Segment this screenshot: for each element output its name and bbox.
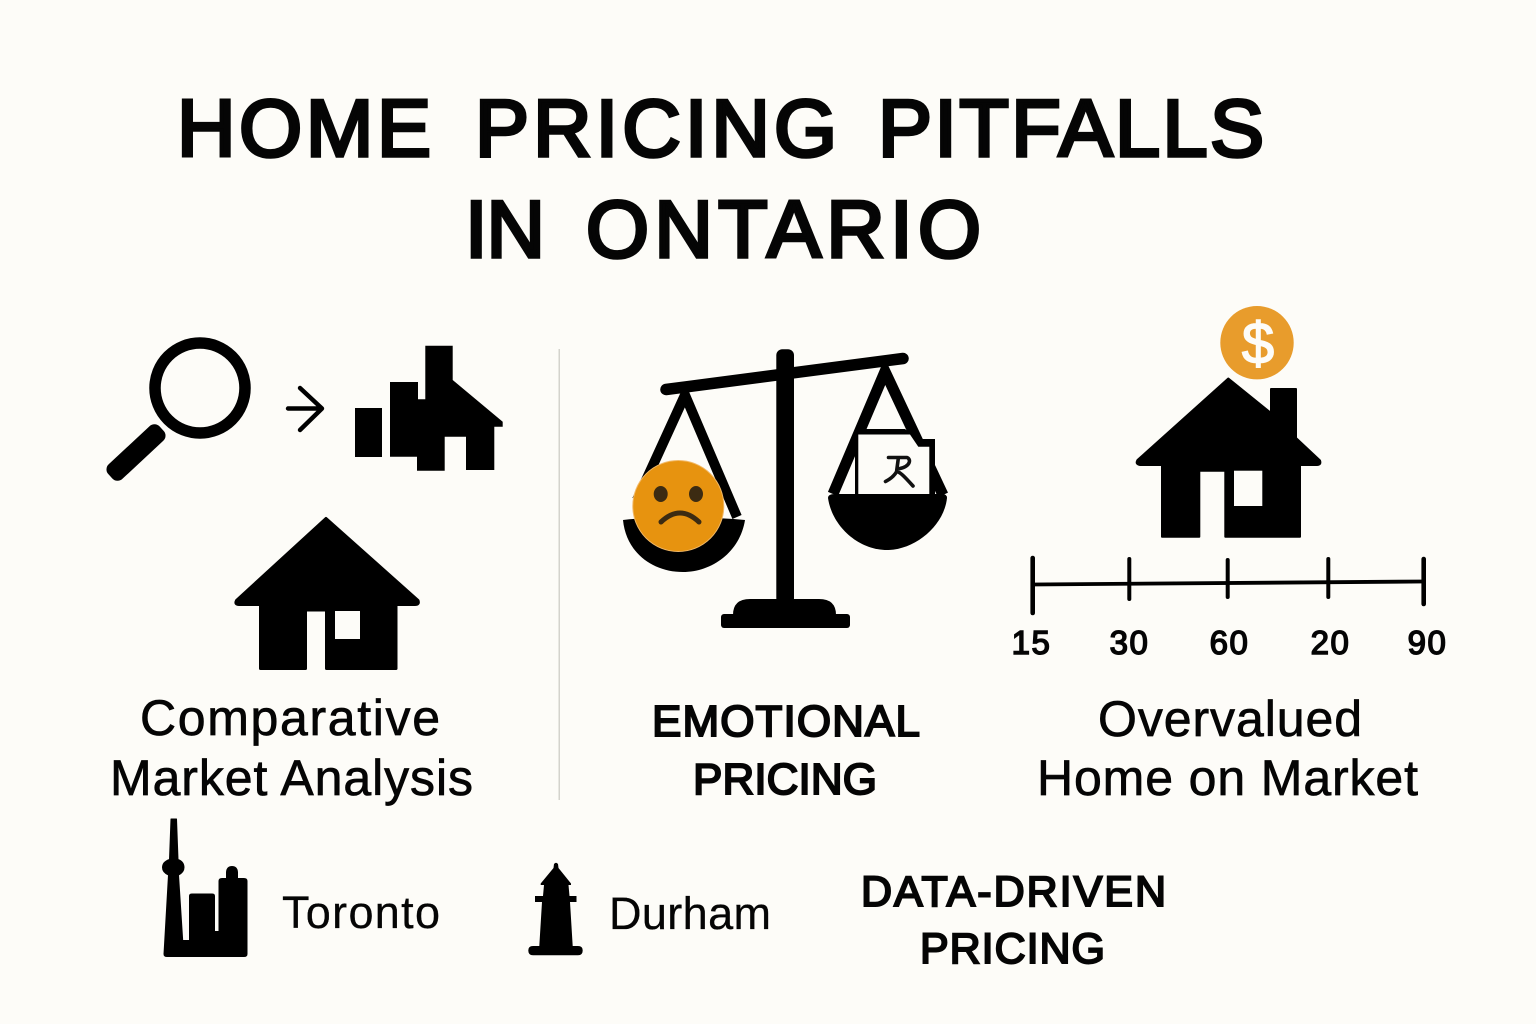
- label: data-driven pricing: PRICING: [920, 925, 1105, 973]
- title: PRICING: [475, 84, 837, 174]
- timeline values: 60: [1210, 624, 1249, 661]
- timeline values: 30: [1110, 624, 1149, 661]
- panel: comparative market analysis: [104, 343, 503, 806]
- label: comparative market analysis: [110, 690, 473, 806]
- icon: sad face: [633, 460, 724, 552]
- document on scale: [855, 429, 935, 494]
- icon: toronto skyline: [162, 819, 247, 956]
- title: PITFALLS: [878, 84, 1264, 174]
- icon: dollar coin: $: [1242, 311, 1274, 376]
- panel: overvalued home on market: [1012, 306, 1447, 806]
- legend: toronto: [162, 819, 440, 956]
- title: [177, 84, 1264, 275]
- label: comparative market analysis: Comparative: [140, 690, 440, 746]
- right pan: [828, 372, 947, 550]
- label: emotional pricing: PRICING: [693, 755, 877, 804]
- label: comparative market analysis: Market Analysis: [110, 750, 473, 806]
- label: overvalued home on market: Overvalued: [1098, 691, 1362, 747]
- icon: house: [236, 518, 418, 668]
- title: IN: [465, 185, 545, 275]
- left pan: [623, 395, 745, 572]
- timeline values: 15: [1012, 624, 1051, 661]
- icon: lighthouse: [528, 863, 583, 955]
- timeline values: 20: [1311, 624, 1350, 661]
- label: emotional pricing: [652, 697, 920, 804]
- title: ONTARIO: [586, 185, 981, 275]
- label: data-driven pricing: DATA-DRIVEN: [861, 868, 1166, 916]
- timeline: [1012, 558, 1447, 661]
- panel: emotional pricing: [623, 349, 947, 804]
- legend: durham: [528, 863, 771, 955]
- label: emotional pricing: EMOTIONAL: [652, 697, 920, 746]
- timeline values: 90: [1408, 624, 1447, 661]
- icon: dollar coin: [1220, 306, 1294, 379]
- icon: balance scale: [623, 349, 947, 628]
- label: overvalued home on market: Home on Market: [1037, 750, 1418, 806]
- label: overvalued home on market: [1037, 691, 1418, 806]
- timeline values: [1012, 624, 1447, 661]
- icon: comparable buildings: [355, 346, 503, 471]
- scale stand: [721, 349, 850, 628]
- icon: magnifying glass: [104, 343, 245, 484]
- label: durham: Durham: [609, 888, 771, 939]
- title: HOME: [177, 84, 431, 174]
- arrow: [288, 388, 322, 430]
- label: data-driven pricing: [861, 868, 1166, 973]
- label: toronto: Toronto: [282, 887, 440, 938]
- scale beam: [666, 358, 903, 390]
- icon: house with chimney: [1137, 378, 1320, 537]
